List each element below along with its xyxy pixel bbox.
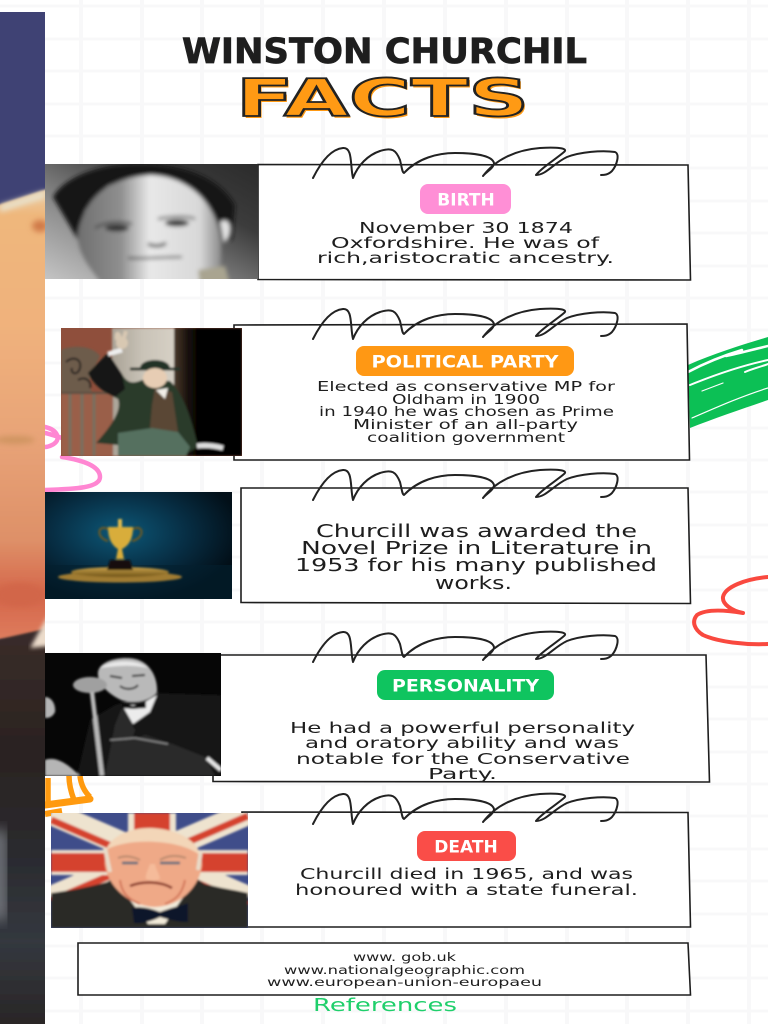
panel: political party label [356, 346, 574, 376]
decoration: orange crown [45, 776, 90, 814]
panel: birth [45, 148, 690, 285]
panel: reference links: www.european-union-europaeu [267, 975, 542, 989]
text: political party details: Oldham in 1900 [392, 393, 540, 408]
photo: gold trophy [45, 492, 232, 599]
text: personality details: and oratory ability and was [305, 734, 619, 752]
photo: Churchill and Union flag [51, 813, 248, 928]
text: nobel prize details: Novel Prize in Literature in [301, 539, 652, 559]
panel: nobel prize [45, 470, 690, 604]
panel: personality [45, 632, 710, 782]
text: political party details: Elected as conservative MP for [317, 380, 616, 395]
panel: political party label: POLITICAL PARTY [372, 352, 559, 372]
heading: FACTS: FACTS [238, 71, 531, 131]
text: nobel prize details: 1953 for his many published [295, 556, 657, 576]
text: political party details: Minister of an all-party [353, 418, 578, 433]
photo: Churchill at microphone [45, 653, 221, 776]
heading: FACTS: FACTS [236, 69, 529, 129]
panel: death [51, 794, 690, 928]
panel: death label: DEATH [434, 838, 498, 858]
text: birth details: Oxfordshire. He was of [331, 234, 600, 252]
text: personality details: notable for the Conservative [296, 750, 630, 768]
text: death details [295, 865, 638, 899]
decoration: green brush scribble [688, 337, 768, 428]
photo: Churchill V sign [61, 328, 242, 456]
decoration: pink loop [45, 427, 100, 490]
photo: young Churchill portrait [45, 164, 258, 285]
text: birth details: November 30 1874 [359, 219, 573, 237]
text: nobel prize details: works. [435, 574, 512, 594]
panel: birth label: BIRTH [437, 190, 495, 210]
text: death details: Churcill died in 1965, and was [300, 865, 633, 883]
text: political party details: in 1940 he was chosen as Prime [319, 405, 614, 420]
panel: political party [61, 309, 690, 460]
panel: reference links [78, 943, 690, 995]
panel: reference links: www.nationalgeographic.com [284, 963, 525, 977]
panel: birth label [420, 184, 511, 214]
panel: personality label [377, 670, 554, 700]
decoration: red swirl [694, 577, 768, 644]
heading: FACTS [236, 69, 531, 131]
text: birth details: rich,aristocratic ancestry. [317, 249, 614, 267]
text: nobel prize details [295, 522, 657, 594]
panel: reference links: www. gob.uk [353, 950, 456, 964]
text: personality details: He had a powerful personality [290, 719, 635, 737]
text: death details: honoured with a state funeral. [295, 881, 638, 899]
text: nobel prize details: Churcill was awarded the [316, 522, 637, 542]
text: birth details [317, 219, 614, 267]
text: political party details: coalition government [367, 431, 565, 446]
left cropped portrait strip [0, 12, 50, 1024]
text: personality details: Party. [428, 765, 497, 783]
panel: death label [417, 831, 516, 861]
title: WINSTON CHURCHIL [182, 32, 587, 72]
text: political party details [317, 380, 616, 446]
heading: references: References [313, 996, 457, 1016]
panel: personality label: PERSONALITY [392, 676, 540, 696]
text: personality details [290, 719, 635, 783]
